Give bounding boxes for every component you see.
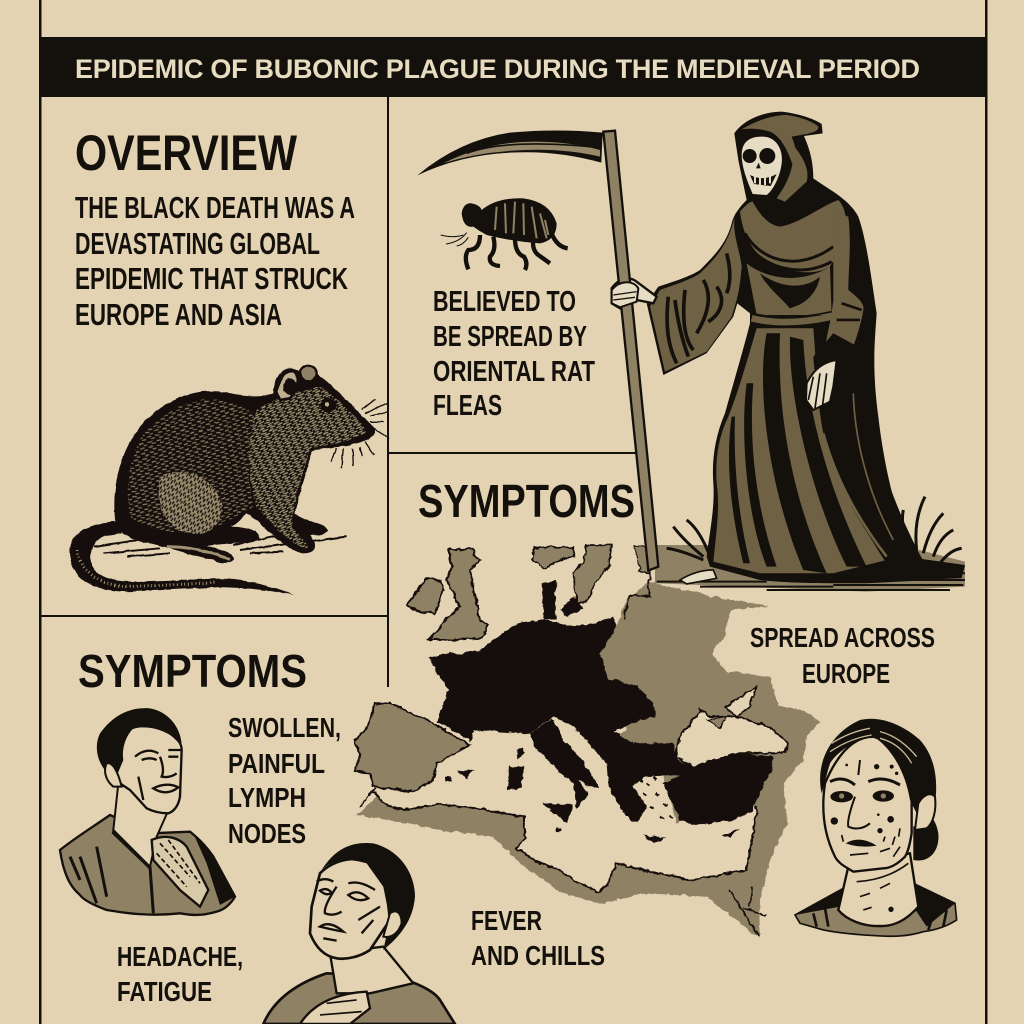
skull [742,137,782,195]
left sleeve [650,215,742,372]
islands [445,747,740,843]
overview text: EPIDEMIC THAT STRUCK [75,261,348,296]
black: worst-hit land [428,617,773,825]
Mediterranean sea [373,717,757,892]
Norway [533,547,573,568]
symptom text: lymph nodes: PAINFUL [228,748,325,779]
flea text: BELIEVED TO [433,286,576,318]
flea text: BE SPREAD BY [433,321,587,353]
overview text: THE BLACK DEATH WAS A [75,190,355,225]
symptom text: headache: HEADACHE, [117,941,243,972]
Black Sea [675,710,788,767]
symptom text: headache: FATIGUE [117,976,212,1007]
cowl drape [740,200,846,272]
overview text: EUROPE AND ASIA [75,297,282,332]
symptom text: headache [117,941,243,1007]
Italy [530,718,600,808]
Jutland [542,580,557,620]
flea text: ORIENTAL RAT [433,356,595,388]
ground under reaper [655,545,965,592]
right sleeve [826,212,864,363]
robe skirt [713,328,887,573]
figure: man with swollen neck [60,708,235,915]
Spain [355,703,470,792]
overview text [75,190,355,332]
scythe pole [603,131,658,571]
infected land olive region [357,582,821,938]
icon: flea [441,198,568,270]
heading: overview: OVERVIEW [75,125,298,181]
hood [742,115,818,178]
grass [667,497,962,563]
symptom text: lymph nodes [228,712,341,849]
spread text [750,622,935,689]
icon: rat [69,365,388,595]
symptom text: fever: AND CHILLS [471,940,605,971]
heading: symptoms upper: SYMPTOMS [418,475,635,527]
overview text: DEVASTATING GLOBAL [75,226,320,261]
robe silhouette [647,112,933,583]
symptom text: fever: FEVER [471,905,542,936]
symptom text: lymph nodes: SWOLLEN, [228,712,341,743]
figure: woman with sores [795,719,957,936]
spread text: SPREAD ACROSS [750,622,935,653]
icon: grim reaper [603,112,962,584]
figure: woman with headache [263,843,455,1024]
Great Britain [428,548,488,640]
Aegean islands [640,777,673,819]
Finland [635,547,650,573]
bony hands [806,360,837,410]
map of Europe [355,545,821,938]
spread text: EUROPE [802,658,890,689]
panel: overview [75,125,355,332]
arrow marks [730,887,767,937]
icon: scythe blade [417,130,603,175]
Ireland [407,578,443,613]
title banner: EPIDEMIC OF BUBONIC PLAGUE DURING THE MEDIEVAL PERIOD [75,54,920,84]
rope belt [752,317,832,322]
flea text [433,286,595,422]
heading: symptoms lower: SYMPTOMS [78,645,307,697]
feet [680,570,717,584]
symptom text: lymph nodes: NODES [228,818,306,849]
flea text: FLEAS [433,390,502,422]
title banner [39,37,987,97]
symptom text: lymph nodes: LYMPH [228,782,306,813]
symptom text: fever [471,905,605,971]
Sweden [573,545,612,603]
